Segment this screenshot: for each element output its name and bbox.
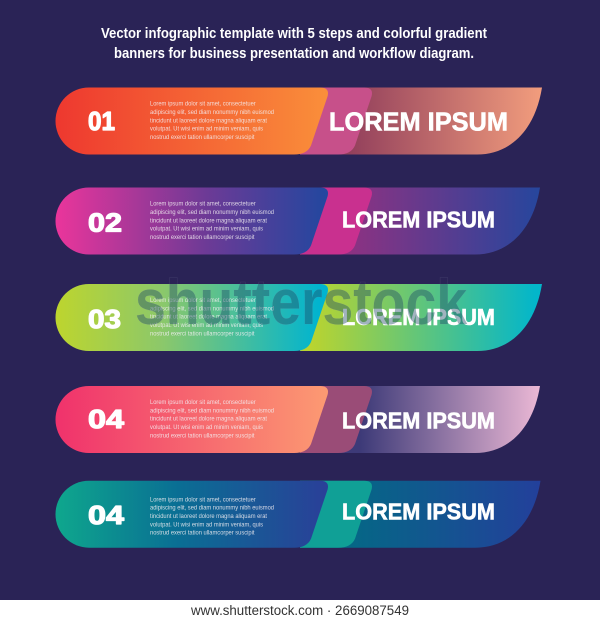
banner 1 body text: tincidunt ut laoreet dolore magna aliquam erat — [150, 117, 267, 124]
banner 4 body text: tincidunt ut laoreet dolore magna aliquam erat — [150, 416, 267, 423]
banner 3 front shape — [55, 284, 328, 351]
banner 3 body text: adipiscing elit, sed diam nonummy nibh euismod — [150, 305, 275, 312]
banner 3 body text: tincidunt ut laoreet dolore magna aliquam erat — [150, 314, 267, 321]
banner 3 heading: LOREM IPSUM — [342, 304, 495, 330]
banner 5 number: 04 — [88, 500, 125, 530]
title — [101, 26, 487, 62]
banner 3 back shape — [300, 284, 542, 351]
banner 2 body text: adipiscing elit, sed diam nonummy nibh euismod — [150, 209, 275, 216]
banner 5 body text: nostrud exerci tation ullamcorper suscipit — [150, 530, 255, 537]
banner 2 heading: LOREM IPSUM — [342, 207, 495, 233]
banner 4 number: 04 — [88, 404, 125, 434]
title: banners for business presentation and workflow diagram. — [114, 46, 474, 62]
banner 4 body text: adipiscing elit, sed diam nonummy nibh euismod — [150, 407, 275, 414]
banner 4 — [55, 386, 540, 453]
banner 3 body text: Lorem ipsum dolor sit amet, consectetuer — [150, 297, 256, 304]
banner 5 middle shape — [300, 481, 372, 548]
banner 1 body text: adipiscing elit, sed diam nonummy nibh euismod — [150, 109, 275, 116]
title: Vector infographic template with 5 steps and colorful gradient — [101, 26, 487, 42]
banner 2 front shape — [55, 188, 328, 254]
footer bar — [0, 600, 600, 620]
banner 3 body text: volutpat. Ut wisi enim ad minim veniam, quis — [150, 322, 263, 329]
banner 1 heading: LOREM IPSUM — [329, 109, 508, 137]
banner 5 body text: tincidunt ut laoreet dolore magna aliquam erat — [150, 513, 267, 520]
banner 5 body text: volutpat. Ut wisi enim ad minim veniam, quis — [150, 521, 263, 528]
banner 1 front shape — [55, 88, 328, 154]
banner 5 — [55, 481, 540, 548]
banner 1 middle shape — [300, 88, 372, 154]
banner 3 body text — [150, 297, 275, 337]
banner 5 body text: Lorem ipsum dolor sit amet, consectetuer — [150, 496, 256, 503]
banner 2 body text: nostrud exerci tation ullamcorper suscipit — [150, 234, 255, 241]
banner 5 body text — [150, 496, 275, 537]
banner 4 back shape — [300, 386, 540, 453]
banner 5 back shape — [300, 481, 540, 548]
banner 2 body text: tincidunt ut laoreet dolore magna aliquam erat — [150, 217, 267, 224]
banner 1 — [55, 88, 542, 154]
banner 4 body text: Lorem ipsum dolor sit amet, consectetuer — [150, 399, 256, 406]
banner 2 body text — [150, 201, 275, 241]
banner 2 body text: volutpat. Ut wisi enim ad minim veniam, quis — [150, 226, 263, 233]
banner 4 body text: volutpat. Ut wisi enim ad minim veniam, quis — [150, 424, 263, 431]
banner 1 body text: volutpat. Ut wisi enim ad minim veniam, quis — [150, 126, 263, 133]
banner 4 front shape — [55, 386, 328, 453]
banner 2 middle shape — [300, 188, 372, 254]
banner 3 number: 03 — [88, 304, 121, 334]
watermark — [137, 277, 468, 325]
banner 4 heading: LOREM IPSUM — [342, 407, 495, 433]
banner 1 body text: nostrud exerci tation ullamcorper suscipit — [150, 134, 255, 141]
banner 1 number: 01 — [88, 106, 115, 136]
banner 3 — [55, 284, 542, 351]
banner 4 middle shape — [300, 386, 372, 453]
banner 2 — [55, 188, 540, 254]
footer credit: www.shutterstock.com · 2669087549 — [190, 603, 409, 618]
banner 5 heading: LOREM IPSUM — [342, 498, 495, 524]
banner 4 body text — [150, 399, 275, 439]
banner 5 body text: adipiscing elit, sed diam nonummy nibh euismod — [150, 505, 275, 512]
banner 1 back shape — [300, 88, 542, 154]
banner 4 body text: nostrud exerci tation ullamcorper suscipit — [150, 432, 255, 439]
banner 5 front shape — [55, 481, 328, 548]
banner 2 back shape — [300, 188, 540, 254]
banner 3 body text: nostrud exerci tation ullamcorper suscipit — [150, 330, 255, 337]
banner 2 number: 02 — [88, 208, 122, 238]
watermark: shutterstock — [135, 266, 467, 338]
watermark: shutterstock — [135, 266, 467, 338]
banner 2 body text: Lorem ipsum dolor sit amet, consectetuer — [150, 201, 256, 208]
banner 1 body text — [150, 101, 275, 141]
banner 1 body text: Lorem ipsum dolor sit amet, consectetuer — [150, 101, 256, 108]
